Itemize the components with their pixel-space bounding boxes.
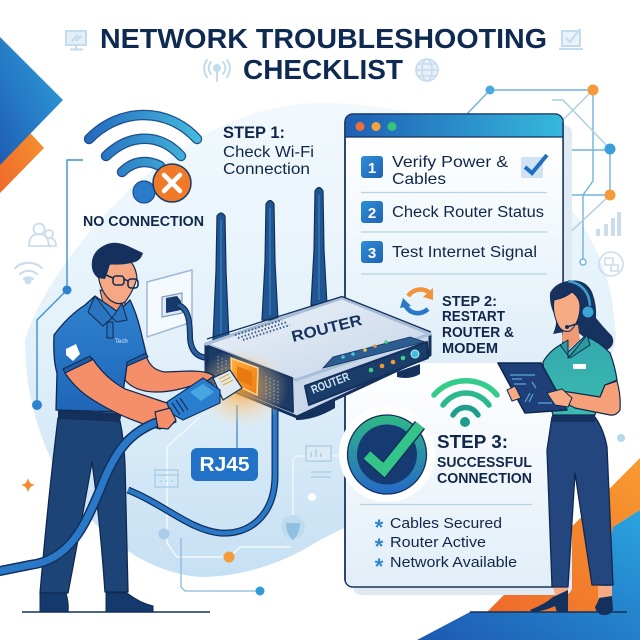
title: NETWORK TROUBLESHOOTING [100, 23, 547, 54]
icon: success badge [339, 406, 435, 502]
dot [617, 434, 625, 442]
woman shirt [543, 336, 617, 415]
side vents [218, 356, 278, 403]
woman face [554, 292, 580, 331]
icon: signal bars [596, 212, 621, 236]
woman belt [552, 415, 595, 422]
icon: browser box [155, 470, 178, 487]
man collar and placket [88, 296, 127, 338]
label: no connection: NO CONNECTION [83, 214, 204, 230]
step 2 text [442, 293, 514, 357]
woman arm [550, 381, 620, 415]
router feet [296, 364, 420, 420]
success list: Network Available [390, 554, 517, 571]
checklist item 1: Verify Power & [392, 154, 508, 171]
step 1 text [223, 123, 314, 178]
router label on lid: ROUTER [290, 312, 364, 346]
step 3 text [437, 432, 532, 487]
headset [565, 281, 594, 329]
man shoes [40, 593, 153, 612]
woman ankles [553, 586, 612, 606]
pale circuit lines under router [158, 417, 340, 596]
step 3 text: STEP 3: [437, 432, 508, 452]
step 1 text: Connection [223, 161, 310, 178]
woman shoes [530, 590, 613, 615]
callout line: no connection [32, 160, 83, 410]
icon: chat circle [599, 252, 623, 276]
icon: sparkle [21, 478, 35, 493]
decorative corner shapes: top left [0, 37, 63, 193]
icon: globe [416, 59, 438, 81]
background blob [25, 103, 616, 577]
router label on front: ROUTER [309, 369, 352, 397]
step 1 text: Check Wi-Fi [223, 144, 314, 161]
man neck [100, 290, 125, 316]
step 3 text: SUCCESSFUL [437, 455, 532, 471]
woman hair [550, 280, 613, 350]
router body [206, 296, 431, 417]
status strip [323, 337, 425, 368]
man sleeve cuffs [63, 353, 148, 373]
man pants [40, 418, 128, 593]
step 2 text: RESTART [442, 309, 505, 325]
checklist item 1: Cables [392, 171, 446, 188]
success list: * [375, 554, 384, 579]
step 2 text: MODEM [442, 341, 498, 357]
tablet [498, 363, 567, 413]
woman pants [547, 417, 613, 587]
title: CHECKLIST [243, 54, 403, 85]
icon: small monitor [306, 446, 331, 477]
icon: broken wifi [89, 115, 197, 203]
man belt [58, 410, 122, 421]
panel: checklist window [345, 114, 572, 595]
icon: restart arrows [400, 288, 433, 313]
man hand on cable [155, 408, 176, 429]
step 2 text: STEP 2: [442, 293, 497, 310]
man shirt [54, 296, 146, 412]
icon: error badge [153, 164, 191, 202]
success list: Router Active [390, 534, 486, 551]
man near arm [65, 358, 176, 429]
router [206, 296, 431, 420]
man face [98, 262, 137, 304]
step 2 text: ROUTER & [442, 325, 514, 341]
connector line and RJ45 label [191, 405, 258, 481]
step 3 text: CONNECTION [437, 471, 532, 487]
checklist item 1: 1 [368, 160, 376, 177]
title [100, 23, 547, 85]
front LEDs [369, 350, 419, 372]
connector line and RJ45 label: RJ45 [200, 454, 250, 476]
man glasses [106, 275, 138, 288]
icon: success wifi [434, 381, 497, 427]
icon: wall socket [147, 270, 210, 358]
checklist item 1 [361, 154, 508, 188]
front panel [305, 342, 428, 405]
success list [375, 515, 517, 579]
man: technician [40, 243, 214, 612]
antennas [213, 188, 327, 340]
checklist item 2: Check Router Status [392, 204, 544, 221]
icon: antenna signal [204, 60, 230, 81]
success list: Cables Secured [390, 515, 502, 532]
checklist item 3 [361, 241, 537, 263]
man arm to hand on plug [125, 355, 214, 392]
name badge [573, 364, 586, 369]
success list: * [375, 515, 384, 540]
checklist item 2 [361, 201, 544, 223]
checklist item 3: 3 [368, 245, 376, 262]
success list: * [375, 534, 384, 559]
icon: checklist laptop [559, 29, 583, 49]
main cable in hand [0, 423, 155, 572]
man hair [92, 243, 143, 279]
icon: monitor [66, 31, 86, 50]
icon: check box [521, 155, 547, 178]
checklist item 3: Test Internet Signal [392, 244, 537, 261]
network cable to router [128, 408, 275, 533]
icon: small wifi [15, 263, 42, 283]
woman collar [560, 335, 590, 358]
vent dots [235, 320, 290, 340]
shirt logo and text: Tech [115, 339, 128, 345]
decorative corner shapes: bottom right [417, 458, 640, 640]
network circuit lines [467, 84, 616, 265]
checklist item 2: 2 [368, 205, 376, 222]
icon: users [29, 224, 56, 246]
shirt logo and text [66, 339, 128, 361]
woman: support agent [498, 280, 620, 615]
top LEDs [341, 340, 388, 359]
port glow [196, 348, 288, 428]
floor lines [22, 611, 627, 613]
RJ45 port [231, 358, 258, 395]
step 1 text: STEP 1: [223, 123, 285, 142]
RJ45 plug [167, 370, 242, 420]
woman neck [562, 325, 580, 350]
woman hands [507, 386, 572, 407]
icon: shield drop [281, 515, 305, 540]
side face [208, 346, 293, 412]
